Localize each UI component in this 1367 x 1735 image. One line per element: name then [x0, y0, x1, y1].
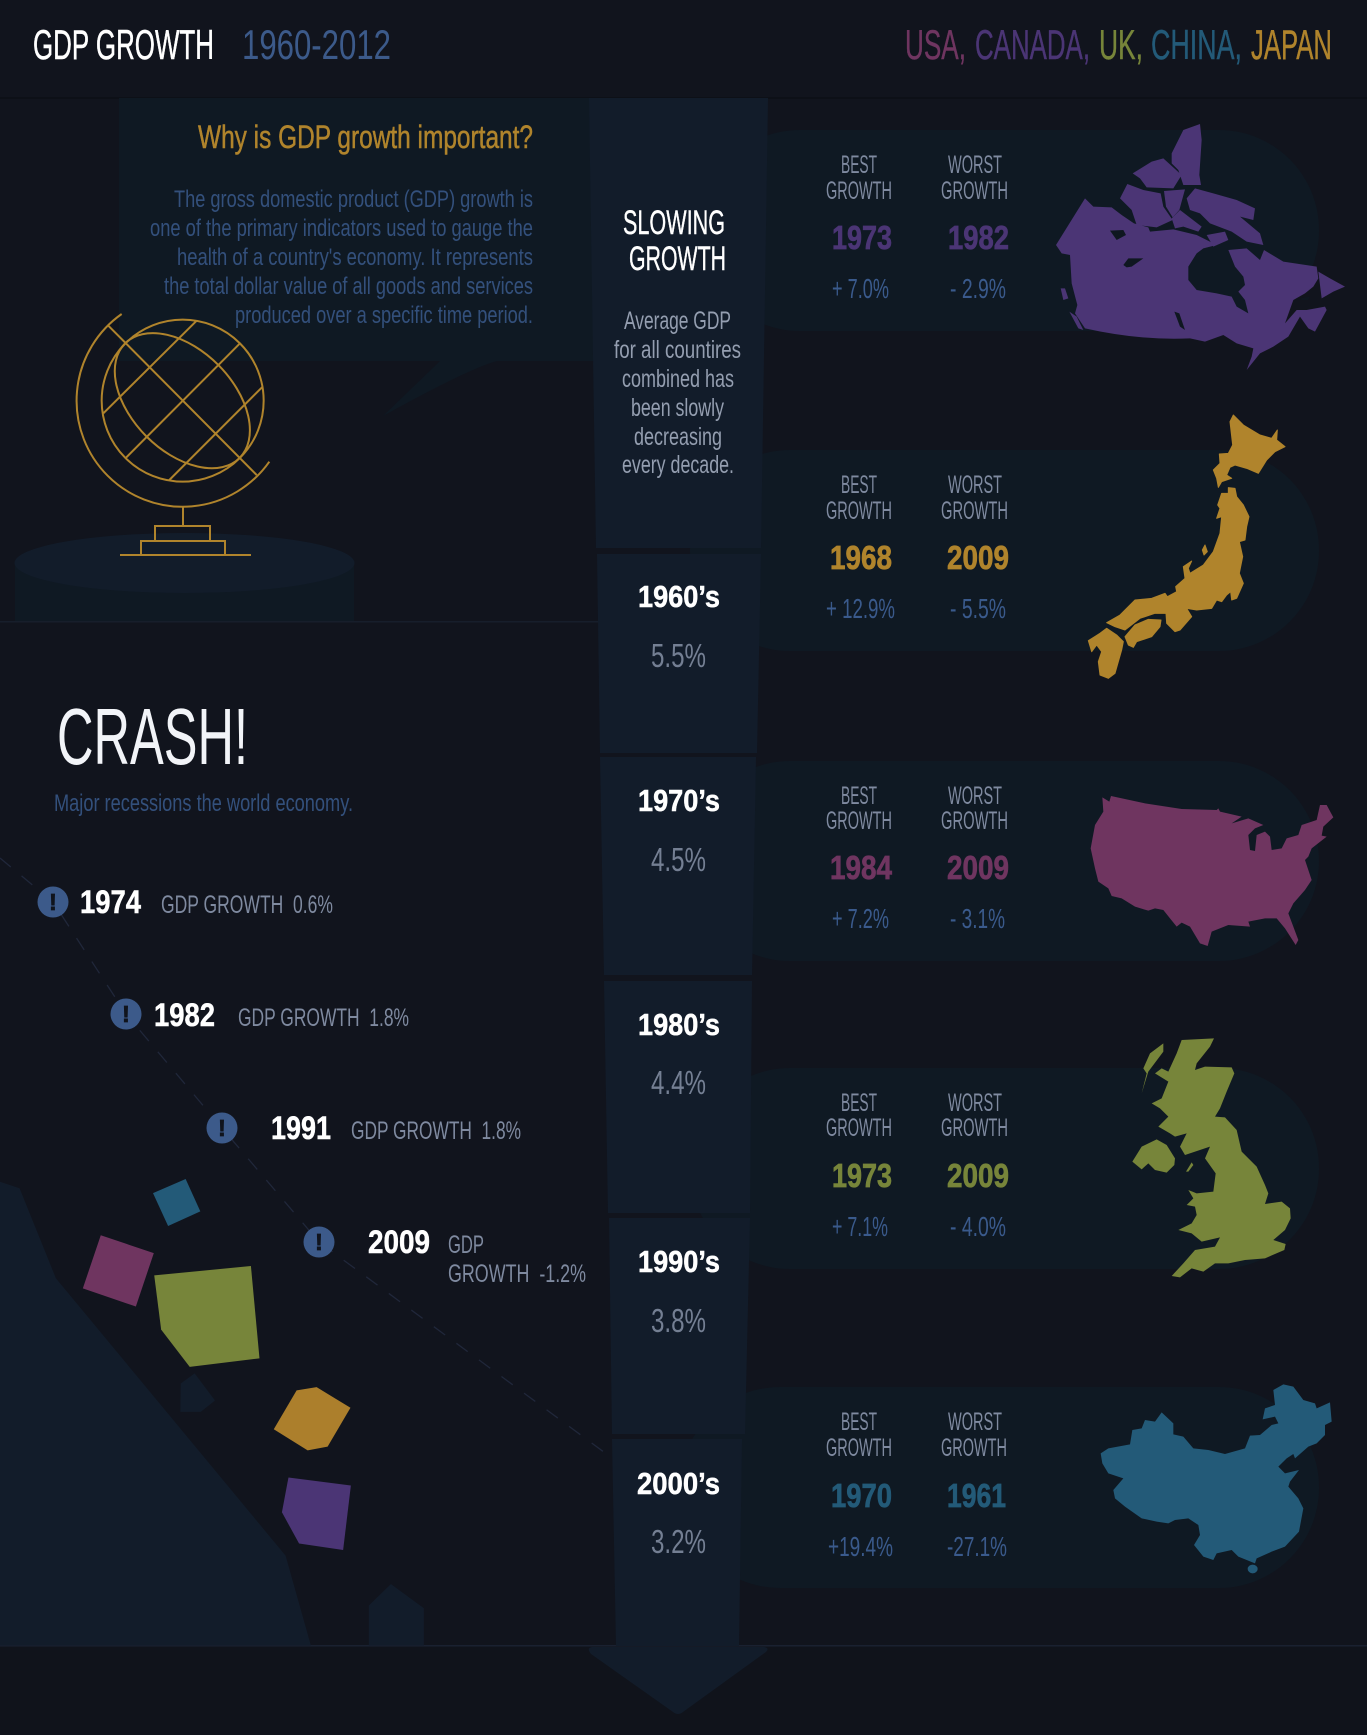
- labels: BEST: [841, 471, 877, 499]
- years: 1961: [947, 1477, 1006, 1514]
- labels: GROWTH: [826, 497, 892, 525]
- years: [831, 1477, 1006, 1514]
- percentages: [826, 593, 1006, 624]
- pedestal: [14, 533, 354, 621]
- panel: USA stats: [690, 761, 1319, 961]
- icon: UK map: [1132, 1038, 1291, 1277]
- years: [832, 219, 1009, 256]
- band: [690, 1068, 1319, 1269]
- slowing growth description: combined has: [622, 365, 734, 393]
- labels: GROWTH: [941, 1114, 1008, 1142]
- labels: GROWTH: [826, 1114, 892, 1142]
- slowing growth description: for all countires: [614, 336, 741, 364]
- band: [700, 130, 1319, 331]
- labels: BEST: [841, 782, 877, 810]
- 2000s value: 3.2%: [651, 1523, 706, 1560]
- dashed trend line: [0, 858, 612, 1458]
- body text: The gross domestic product (GDP) growth is: [174, 186, 533, 213]
- 1990s value: [638, 1244, 720, 1339]
- percentages: - 2.9%: [950, 273, 1006, 304]
- 1960s value: 5.5%: [651, 637, 706, 674]
- slowing growth block: [589, 98, 768, 548]
- body text: one of the primary indicators used to gauge the: [150, 215, 533, 242]
- band: [680, 1387, 1319, 1588]
- recession 1982: 1982: [154, 997, 215, 1033]
- labels: WORST: [948, 1089, 1002, 1117]
- years: 2009: [947, 539, 1009, 576]
- slowing growth description: decreasing: [634, 423, 722, 451]
- labels: [826, 782, 1008, 835]
- 1990s value: 3.8%: [651, 1302, 706, 1339]
- 1970s value: 4.5%: [651, 841, 706, 878]
- 1960s block: [597, 554, 761, 753]
- slowing growth heading: GROWTH: [629, 240, 726, 278]
- panel: central funnel column: [589, 98, 768, 1714]
- labels: BEST: [841, 151, 877, 179]
- falling blocks: [83, 1179, 424, 1646]
- labels: BEST: [841, 1408, 877, 1436]
- crash subheading: Major recessions the world economy.: [54, 790, 353, 817]
- 1970s block: [600, 757, 756, 975]
- 2000s block: [612, 1439, 742, 1646]
- country legend: CANADA,: [975, 21, 1090, 68]
- percentages: - 5.5%: [950, 593, 1006, 624]
- recession 2009: GDP: [448, 1231, 484, 1259]
- years: 2009: [947, 849, 1009, 886]
- body text: [150, 186, 533, 329]
- recession 1991: GDP GROWTH 1.8%: [351, 1117, 521, 1145]
- country legend: USA,: [905, 21, 966, 68]
- recession 2009: GROWTH -1.2%: [448, 1260, 586, 1288]
- recession 1982: !: [122, 1001, 130, 1027]
- icon: Canada map: [1056, 124, 1345, 370]
- icon: USA map: [1091, 796, 1333, 946]
- percentages: + 7.2%: [832, 903, 889, 934]
- recession 1982: [110, 997, 409, 1033]
- percentages: + 7.0%: [832, 273, 889, 304]
- panel: Canada stats: [700, 130, 1319, 331]
- recession 1991: 1991: [271, 1110, 331, 1146]
- labels: GROWTH: [826, 807, 892, 835]
- labels: WORST: [948, 471, 1002, 499]
- 1980s block: [604, 981, 752, 1213]
- band: [690, 450, 1319, 651]
- recession 1991: [206, 1110, 521, 1146]
- labels: BEST: [841, 1089, 877, 1117]
- body text: produced over a specific time period.: [235, 302, 533, 329]
- cliff shape: [0, 1182, 311, 1646]
- 1970s value: [638, 783, 720, 878]
- icon: globe: [77, 308, 275, 555]
- body text: the total dollar value of all goods and services: [164, 273, 533, 300]
- percentages: [832, 1211, 1006, 1242]
- band: [690, 761, 1319, 961]
- icon: Japan map: [1088, 415, 1285, 678]
- percentages: -27.1%: [947, 1531, 1007, 1562]
- recession 1974: !: [49, 889, 57, 915]
- panel: why is GDP growth important: [119, 98, 595, 416]
- 2000s value: 2000’s: [637, 1466, 720, 1501]
- labels: [826, 1089, 1008, 1142]
- title: GDP GROWTH: [33, 21, 214, 68]
- recession 2009: !: [315, 1229, 323, 1255]
- percentages: +19.4%: [828, 1531, 893, 1562]
- header: [33, 21, 1332, 68]
- years: 1970: [831, 1477, 892, 1514]
- 1980s value: [638, 1007, 720, 1101]
- percentages: [828, 1531, 1007, 1562]
- 1980s value: 1980’s: [638, 1007, 720, 1042]
- labels: [826, 1408, 1007, 1462]
- country legend: [905, 21, 1332, 68]
- slowing growth heading: SLOWING: [623, 204, 725, 242]
- recession 1974: [38, 884, 333, 920]
- labels: [826, 471, 1008, 525]
- years: 1973: [832, 219, 892, 256]
- percentages: + 12.9%: [826, 593, 895, 624]
- 1980s value: 4.4%: [651, 1064, 706, 1101]
- recession 2009: 2009: [368, 1224, 430, 1260]
- recession 2009: [304, 1224, 586, 1288]
- labels: GROWTH: [826, 177, 892, 205]
- heading: Why is GDP growth important?: [198, 119, 533, 155]
- labels: GROWTH: [826, 1434, 892, 1462]
- panel: crash: [0, 692, 612, 1646]
- labels: GROWTH: [941, 497, 1008, 525]
- labels: [826, 151, 1008, 205]
- icon: China map: [1101, 1384, 1332, 1573]
- slowing growth description: Average GDP: [624, 307, 731, 335]
- recession 1991: !: [218, 1115, 226, 1141]
- arrow: funnel head: [589, 1647, 768, 1714]
- panel: Japan stats: [690, 450, 1319, 651]
- years: [830, 539, 1009, 576]
- recession 1974: 1974: [80, 884, 141, 920]
- panel: UK stats: [690, 1068, 1319, 1269]
- years: 1984: [830, 849, 893, 886]
- country legend: CHINA,: [1151, 21, 1242, 68]
- slowing growth description: every decade.: [622, 451, 734, 479]
- years: [832, 1157, 1009, 1194]
- 1960s value: 1960’s: [638, 579, 720, 614]
- 2000s value: [637, 1466, 720, 1560]
- recession 1974: GDP GROWTH 0.6%: [161, 891, 333, 919]
- years: 1968: [830, 539, 892, 576]
- slowing growth description: been slowly: [631, 394, 724, 422]
- panel: China stats: [680, 1387, 1319, 1588]
- 1960s value: [638, 579, 720, 674]
- date range: 1960-2012: [242, 21, 391, 68]
- labels: GROWTH: [941, 1434, 1007, 1462]
- labels: GROWTH: [941, 177, 1008, 205]
- percentages: - 4.0%: [950, 1211, 1006, 1242]
- 1990s block: [609, 1218, 750, 1434]
- years: 1973: [832, 1157, 892, 1194]
- crash heading: CRASH!: [57, 692, 248, 781]
- labels: GROWTH: [941, 807, 1008, 835]
- percentages: [832, 273, 1006, 304]
- recession 1982: GDP GROWTH 1.8%: [238, 1004, 409, 1032]
- 1990s value: 1990’s: [638, 1244, 720, 1279]
- years: 1982: [948, 219, 1009, 256]
- 1970s value: 1970’s: [638, 783, 720, 818]
- body text: health of a country's economy. It represents: [177, 244, 533, 271]
- labels: WORST: [948, 151, 1002, 179]
- percentages: - 3.1%: [950, 903, 1005, 934]
- years: [830, 849, 1009, 886]
- percentages: [832, 903, 1005, 934]
- slowing growth heading: [623, 204, 726, 278]
- labels: WORST: [948, 1408, 1002, 1436]
- labels: WORST: [948, 782, 1002, 810]
- years: 2009: [947, 1157, 1009, 1194]
- slowing growth description: [614, 307, 741, 479]
- speech bubble: [119, 98, 595, 416]
- percentages: + 7.1%: [832, 1211, 888, 1242]
- country legend: UK,: [1099, 21, 1143, 68]
